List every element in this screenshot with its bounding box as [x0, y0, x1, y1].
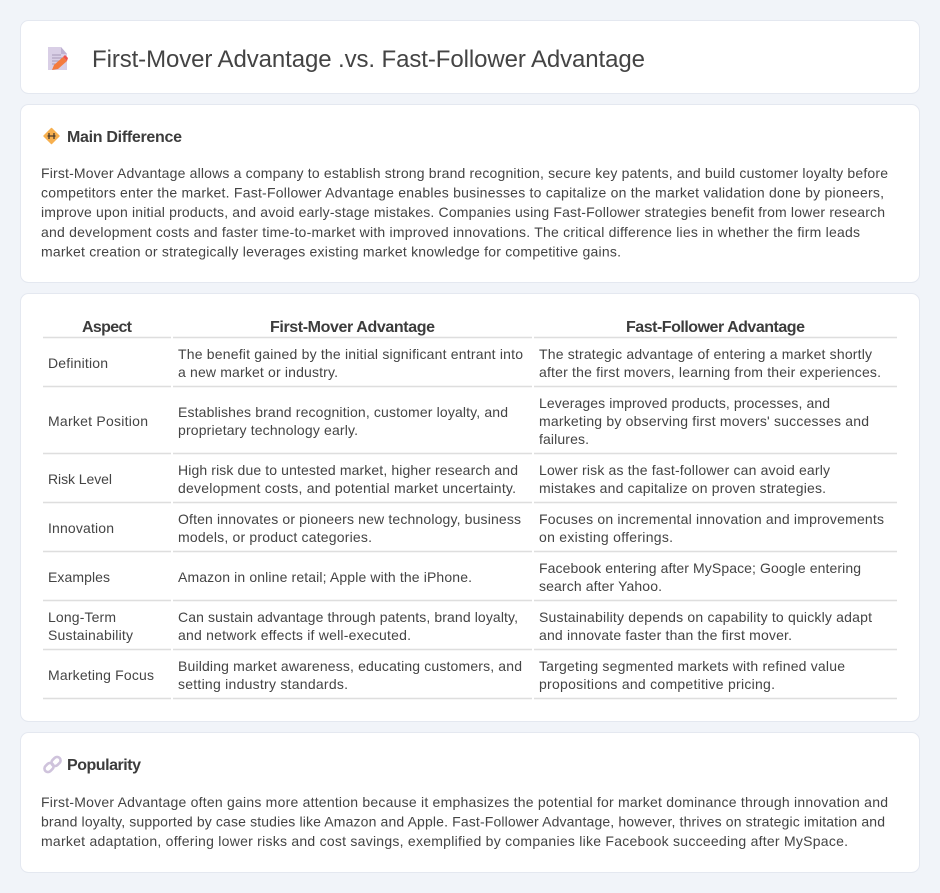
- row: risk level: mistakes and capitalize on proven strategies.: [539, 480, 826, 496]
- panel: header: [20, 20, 920, 94]
- row: innovation: Often innovates or pioneers new technology, business: [178, 511, 521, 527]
- row: risk level: development costs, and potential market uncertainty.: [178, 480, 516, 496]
- row: innovation: [48, 511, 884, 545]
- table header row: Fast-Follower Advantage: [626, 319, 805, 336]
- icon: document with pencil: [48, 47, 68, 70]
- row: examples: [48, 560, 861, 594]
- row: examples: Facebook entering after MySpace; Google entering: [539, 560, 861, 576]
- table header row: [82, 319, 805, 336]
- panel: popularity: [20, 732, 920, 872]
- row: innovation: Innovation: [48, 520, 114, 536]
- row: risk level: High risk due to untested market, higher research and: [178, 462, 518, 478]
- row: marketing focus: Marketing Focus: [48, 667, 154, 683]
- row: market position: failures.: [539, 431, 589, 447]
- row: definition: Definition: [48, 355, 108, 371]
- row: risk level: [48, 462, 830, 496]
- row: risk level: Lower risk as the fast-follower can avoid early: [539, 462, 830, 478]
- row: innovation: Focuses on incremental innovation and improvements: [539, 511, 884, 527]
- heading: main difference: Main Difference: [67, 129, 182, 146]
- row: definition: The strategic advantage of entering a market shortly: [539, 346, 872, 362]
- text block: main difference: improve upon initial products, and avoid early-stage mistakes. Companies using Fast-Follower strategies benefit from lower research: [41, 204, 885, 220]
- text block: main difference: and development costs and faster time-to-market with improved innovations. The critical difference lies in whether the firm leads: [41, 224, 860, 240]
- row: long-term sustainability: and network effects if well-executed.: [178, 627, 411, 643]
- row: definition: The benefit gained by the initial significant entrant into: [178, 346, 523, 362]
- text block: popularity: First-Mover Advantage often gains more attention because it emphasizes the potential for market dominance through innovation and: [41, 794, 888, 810]
- row: market position: Market Position: [48, 413, 148, 429]
- row: innovation: on existing offerings.: [539, 529, 673, 545]
- row: long-term sustainability: Sustainability: [48, 627, 133, 643]
- row: marketing focus: propositions and competitive pricing.: [539, 676, 775, 692]
- row: market position: Establishes brand recognition, customer loyalty, and: [178, 404, 508, 420]
- row: market position: proprietary technology early.: [178, 422, 358, 438]
- text block: popularity: brand loyalty, supported by case studies like Amazon and Apple. Fast-Follower Advantage, however, thrives on strategic imitation and: [41, 814, 885, 830]
- title: First-Mover Advantage .vs. Fast-Follower Advantage: [92, 46, 645, 73]
- row: market position: [48, 395, 869, 447]
- text block: popularity: market adaptation, offering lower risks and cost savings, exemplified by companies like Facebook succeeding after MySpace.: [41, 833, 848, 849]
- table grid lines: [43, 338, 897, 698]
- row: market position: Leverages improved products, processes, and: [539, 395, 830, 411]
- row: risk level: Risk Level: [48, 471, 112, 487]
- table header row: First-Mover Advantage: [270, 319, 435, 336]
- row: examples: Amazon in online retail; Apple with the iPhone.: [178, 569, 472, 585]
- text block: main difference: First-Mover Advantage allows a company to establish strong brand recognition, secure key patents, and build customer loyalty before: [41, 165, 888, 181]
- text block: main difference: [41, 165, 888, 260]
- row: long-term sustainability: Sustainability depends on capability to quickly adapt: [539, 609, 872, 625]
- panel: comparison table: [20, 294, 920, 722]
- row: innovation: models, or product categories.: [178, 529, 372, 545]
- row: definition: a new market or industry.: [178, 364, 338, 380]
- row: marketing focus: Targeting segmented markets with refined value: [539, 658, 845, 674]
- row: long-term sustainability: [48, 609, 872, 643]
- text block: popularity: [41, 794, 888, 849]
- row: marketing focus: Building market awareness, educating customers, and: [178, 658, 522, 674]
- row: definition: after the first movers, learning from their experiences.: [539, 364, 881, 380]
- icon: chain link: [43, 755, 62, 774]
- row: long-term sustainability: Long-Term: [48, 609, 116, 625]
- row: marketing focus: [48, 658, 845, 692]
- row: definition: [48, 346, 881, 380]
- text block: main difference: competitors enter the market. Fast-Follower Advantage enables businesses to capitalize on the market validation done by pioneers,: [41, 184, 884, 200]
- row: examples: search after Yahoo.: [539, 578, 662, 594]
- row: examples: Examples: [48, 569, 110, 585]
- heading: popularity: Popularity: [67, 757, 141, 774]
- icon: orange diamond: [44, 128, 59, 144]
- table header row: Aspect: [82, 319, 133, 336]
- row: long-term sustainability: and innovate faster than the first mover.: [539, 627, 792, 643]
- panel: main difference: [20, 104, 920, 282]
- text block: main difference: market creation or strategically leverages existing market knowledge for competitive gains.: [41, 244, 621, 260]
- row: market position: marketing by observing first movers' successes and: [539, 413, 869, 429]
- row: marketing focus: setting industry standards.: [178, 676, 348, 692]
- row: long-term sustainability: Can sustain advantage through patents, brand loyalty,: [178, 609, 518, 625]
